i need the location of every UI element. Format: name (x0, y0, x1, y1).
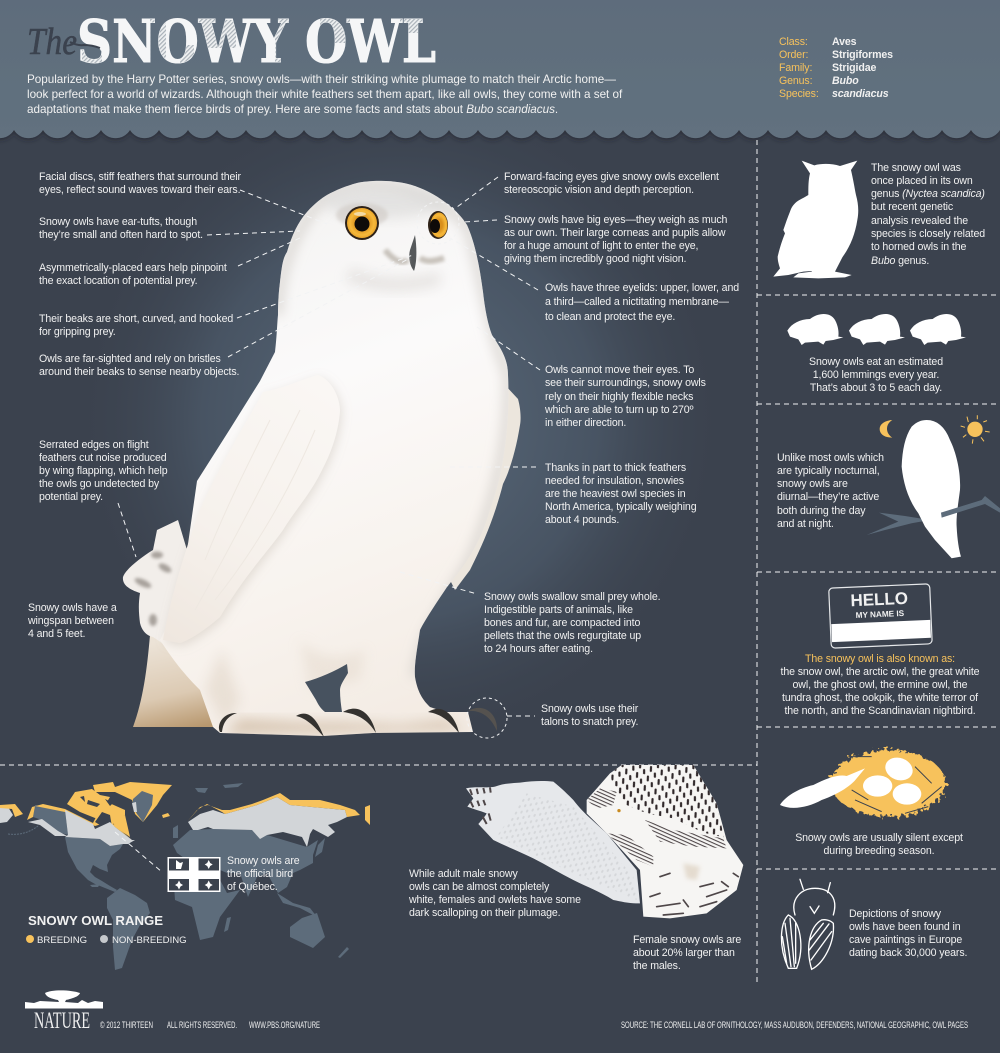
title: The (27, 21, 77, 63)
annotation: bristles: around their beaks to sense nearby objects. (39, 366, 239, 378)
annotation: facial discs: Facial discs, stiff feathers that surround their (39, 171, 241, 183)
icon: nest with eggs and feather (780, 750, 946, 817)
owl photo illustration (123, 181, 521, 737)
text: other names: the north, and the Scandinavian nightbird. (784, 705, 976, 717)
annotation: wingspan: Snowy owls have a (28, 602, 117, 614)
owl body (160, 181, 508, 736)
text: lemmings: 1,600 lemmings every year. (813, 369, 939, 381)
annotation: eyelids: Owls have three eyelids: upper, lower, and (545, 282, 739, 294)
icon: hello name tag: MY NAME IS (855, 609, 905, 620)
callout lines on owl (118, 177, 540, 738)
annotation: pellets: bones and fur, are compacted into (484, 617, 640, 629)
map legend: SNOWY OWL RANGE (28, 913, 163, 928)
breeding eurasia (187, 793, 360, 822)
icon: great horned owl silhouette (773, 161, 858, 278)
text: female size: Female snowy owls are (633, 934, 741, 946)
annotation: serrated feathers: by wing flapping, which help (39, 465, 168, 477)
text: diurnal: snowy owls are (777, 478, 848, 490)
map legend (26, 913, 187, 946)
taxonomy labels: Class: (779, 36, 808, 48)
text: genus history: species is closely related (871, 228, 985, 240)
flying owl head (587, 788, 617, 808)
breeding north america (27, 804, 132, 840)
annotation: forward eyes: stereoscopic vision and depth perception. (504, 184, 694, 196)
annotation: beaks: Their beaks are short, curved, and hooked (39, 313, 233, 325)
intro text: look perfect for a world of wizards. Although their white feathers set them apart, like all owls, they come with a set of (27, 88, 623, 101)
annotation: beaks: for gripping prey. (39, 326, 116, 338)
annotation: pellets: Indigestible parts of animals, like (484, 604, 633, 616)
icon: hello name tag: HELLO (850, 589, 908, 610)
text: plumage: While adult male snowy (409, 868, 518, 880)
taxonomy labels: Family: (779, 62, 812, 74)
taxonomy labels: Strigiformes (832, 49, 893, 61)
text: diurnal: both during the day (777, 505, 866, 517)
non-breeding north america (28, 810, 135, 846)
annotation: serrated feathers: potential prey. (39, 491, 103, 503)
annotation: heaviest owl: North America, typically weighing (545, 501, 697, 513)
owl leg gap (305, 664, 348, 712)
footer credits: WWW.PBS.ORG/NATURE (249, 1019, 320, 1030)
text: other names: the snow owl, the arctic owl, the great white (781, 666, 980, 678)
flying owl tail bars (683, 863, 700, 880)
annotation: big eyes: for a huge amount of light to enter the eye, (504, 240, 698, 252)
annotation: heaviest owl: Thanks in part to thick feathers (545, 462, 686, 474)
text: genus history: analysis revealed the (871, 215, 968, 227)
annotation: flexible necks: see their surroundings, snowy owls (545, 377, 706, 389)
annotation: big eyes: Snowy owls have big eyes—they weigh as much (504, 214, 728, 226)
annotation: big eyes: as our own. Their large corneas and pupils allow (504, 227, 726, 239)
taxonomy labels: Species: (779, 88, 819, 100)
owl wing tip markings (133, 552, 173, 626)
annotation: eyelids: a third—called a nictitating membrane— (545, 296, 729, 308)
annotation: flexible necks: in either direction. (545, 417, 626, 429)
annotation: pellets: Snowy owls swallow small prey whole. (484, 591, 660, 603)
taxonomy labels: Strigidae (832, 62, 876, 74)
flying owl body (587, 765, 743, 918)
text: genus history: once placed in its own (871, 175, 973, 187)
logo: nature (25, 990, 103, 1033)
non-breeding eurasia (188, 797, 347, 847)
icon: hello name tag (829, 584, 932, 648)
text: genus history: but recent genetic (871, 201, 954, 213)
map legend: BREEDING (37, 935, 87, 946)
annotation: talons: talons to snatch prey. (541, 716, 638, 728)
title (29, 18, 436, 64)
annotation: ear tufts: they’re small and often hard to spot. (39, 229, 203, 241)
icon: three lemmings (787, 314, 966, 345)
text: cave paintings: Depictions of snowy (849, 908, 942, 920)
text: other names (781, 653, 980, 717)
aleutian islands (8, 826, 38, 834)
owl back wing (430, 385, 521, 590)
annotation: serrated feathers: feathers cut noise produced (39, 452, 167, 464)
text: plumage: owls can be almost completely (409, 881, 550, 893)
text: diurnal: diurnal—they’re active (777, 491, 879, 503)
text: diurnal: are typically nocturnal, (777, 465, 880, 477)
annotation: heaviest owl: are the heaviest owl species in (545, 488, 686, 500)
annotation: talons: Snowy owls use their (541, 703, 639, 715)
text: lemmings: Snowy owls eat an estimated (809, 356, 943, 368)
text: other names: owl, the ghost owl, the ermine owl, the (793, 679, 968, 691)
logo: nature: NATURE (34, 1008, 90, 1033)
annotation: forward eyes: Forward-facing eyes give snowy owls excellent (504, 171, 719, 183)
owl eyes (336, 203, 448, 240)
text: cave paintings: owls have been found in (849, 921, 961, 933)
text: silent: during breeding season. (824, 845, 934, 857)
flying owl speckled back (607, 765, 727, 838)
flying owl barred flank (607, 820, 727, 867)
annotation: big eyes: giving them incredibly good night vision. (504, 253, 686, 265)
text: genus history: to horned owls in the (871, 241, 966, 253)
world range map (0, 782, 370, 970)
annotation: serrated feathers: the owls go undetected by (39, 478, 160, 490)
annotation: flexible necks: which are able to turn up to 270º (544, 404, 694, 416)
text: cave paintings: dating back 30,000 years. (849, 947, 967, 959)
text: other names: tundra ghost, the ookpik, the white terror of (782, 692, 978, 704)
annotation: heaviest owl: needed for insulation, snowies (545, 475, 684, 487)
annotation: bristles: Owls are far-sighted and rely on bristles (39, 353, 221, 365)
annotation: serrated feathers: Serrated edges on flight (39, 439, 149, 451)
owl wing feather strokes (195, 410, 315, 610)
taxonomy labels: scandiacus (832, 88, 889, 100)
title: SNOWY OWL (77, 7, 436, 76)
annotation: asymmetric ears: Asymmetrically-placed ears help pinpoint (39, 262, 227, 274)
owl volume shading (205, 185, 508, 735)
taxonomy labels: Order: (779, 49, 808, 61)
annotation: flexible necks: Owls cannot move their eyes. To (545, 364, 694, 376)
title: SNOWY OWL (77, 7, 436, 76)
footer credits: ALL RIGHTS RESERVED. (167, 1019, 237, 1030)
text: plumage: dark scalloping on their plumage. (409, 907, 561, 919)
text: genus history: The snowy owl was (871, 162, 961, 174)
owl talons (219, 708, 497, 737)
text: official bird: the official bird (227, 868, 293, 880)
icon: owl on branch with moon and sun (867, 415, 1000, 558)
icon: cave painting owl (781, 879, 835, 969)
taxonomy labels: Bubo (832, 75, 859, 87)
intro text: Popularized by the Harry Potter series, snowy owls—with their striking white plumage to match their Arctic home— (27, 73, 616, 86)
north america (65, 837, 123, 892)
owl folded wing (163, 375, 340, 643)
owl rear wing feathers (123, 520, 190, 645)
africa (173, 862, 240, 940)
alaska slate (33, 805, 68, 835)
text: other names: The snowy owl is also known as: (805, 653, 955, 665)
text: genus history: genus (Nyctea scandica) (871, 188, 985, 200)
annotation: eyelids: to clean and protect the eye. (545, 311, 675, 323)
annotation: pellets: to 24 hours after eating. (484, 643, 593, 655)
icon: quebec flag (168, 857, 220, 892)
footer credits: © 2012 THIRTEEN (100, 1019, 153, 1030)
text: silent: Snowy owls are usually silent except (795, 832, 963, 844)
text: official bird: Snowy owls are (227, 855, 300, 867)
annotation: ear tufts: Snowy owls have ear-tufts, though (39, 216, 197, 228)
europe and asia (173, 829, 318, 897)
text: official bird: of Québec. (227, 881, 278, 893)
taxonomy labels (779, 36, 893, 100)
owl beak (409, 235, 416, 271)
text: plumage: white, females and owlets have some (408, 894, 581, 906)
map legend: NON-BREEDING (112, 935, 187, 946)
intro text: adaptations that make them fierce birds of prey. Here are some facts and stats about Bubo scandiacus. (27, 103, 558, 116)
annotation: heaviest owl: about 4 pounds. (545, 514, 619, 526)
annotation: asymmetric ears: the exact location of potential prey. (39, 275, 198, 287)
text: diurnal: Unlike most owls which (777, 452, 884, 464)
annotation: pellets: pellets that the owls regurgitate up (484, 630, 641, 642)
text: lemmings: That’s about 3 to 5 each day. (810, 382, 942, 394)
oceania and islands (90, 783, 349, 958)
panel: header band with scalloped edge (0, 0, 1000, 138)
greenland breeding (93, 782, 172, 822)
siberia wraparound (0, 807, 13, 823)
text: female size: about 20% larger than (633, 947, 735, 959)
taxonomy labels: Aves (832, 36, 857, 48)
flying owl photo (466, 765, 743, 918)
text: female size: the males. (633, 960, 681, 972)
owl tail (133, 620, 240, 727)
south america (107, 888, 150, 970)
text: diurnal: and at night. (777, 518, 834, 530)
quebec callout line (115, 832, 162, 872)
flying owl wing (466, 781, 640, 903)
taxonomy labels: Genus: (779, 75, 812, 87)
text: genus history: Bubo genus. (871, 255, 929, 267)
text: cave paintings: cave paintings in Europe (849, 934, 962, 946)
annotation: wingspan: 4 and 5 feet. (28, 628, 85, 640)
annotation: wingspan: wingspan between (27, 615, 114, 627)
annotation: facial discs: eyes, reflect sound waves toward their ears. (39, 184, 240, 196)
annotation: flexible necks: rely on their highly flexible necks (545, 391, 693, 403)
footer credits (100, 1019, 320, 1030)
